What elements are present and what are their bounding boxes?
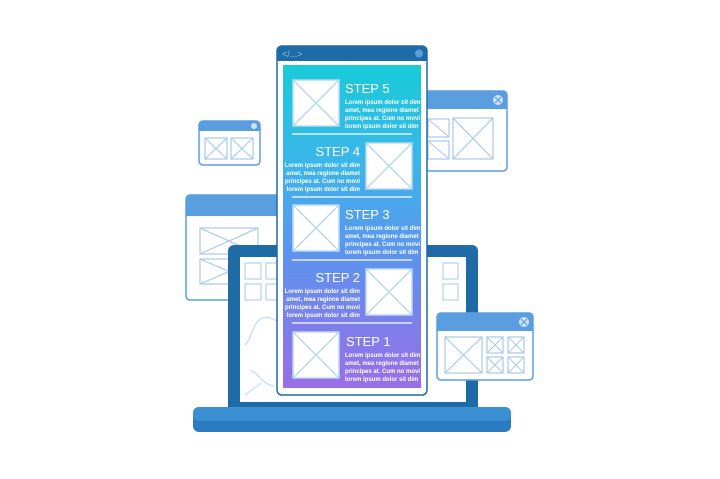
step 1: lorem ipsum dolor sit dim [345,377,418,383]
window: right bottom [437,313,533,380]
step 3: STEP 3 [345,207,390,222]
step 2: STEP 2 [315,270,360,285]
step 5: principes at. Cum no movi [345,116,420,122]
step 1: principes at. Cum no movi [345,369,420,375]
window: left small [199,121,260,165]
step 4: STEP 4 [315,144,360,159]
step 4 [285,143,412,193]
laptop [193,245,511,432]
step 4: amet, mea regione diamet [286,171,360,177]
window: right top [418,91,507,171]
phone [277,46,427,395]
step 3: Lorem ipsum dolor sit dim [345,226,420,232]
step 5: STEP 5 [345,81,390,96]
step 3: principes at. Cum no movi [345,242,420,248]
step 3 [293,205,420,256]
step 1: Lorem ipsum dolor sit dim [345,353,420,359]
laptop base [193,407,511,432]
step 1: STEP 1 [346,334,391,349]
window: left large [186,195,286,300]
step 2: amet, mea regione diamet [286,297,360,303]
step 4: Lorem ipsum dolor sit dim [285,163,360,169]
step 5 [293,80,420,130]
step 5: amet, mea regione diamet [345,108,419,114]
phone: </...> [282,49,303,59]
step 1: amet, mea regione diamet [345,361,419,367]
step 1 [293,332,420,383]
step 2 [285,269,412,319]
step 5: Lorem ipsum dolor sit dim [345,100,420,106]
step 4: principes at. Cum no movi [285,179,360,185]
step 4: lorem ipsum dolor sit dim [287,187,360,193]
step 2: Lorem ipsum dolor sit dim [285,289,360,295]
step 2: principes at. Cum no movi [285,305,360,311]
step 5: lorem ipsum dolor sit dim [345,124,418,130]
step 2: lorem ipsum dolor sit dim [287,313,360,319]
step 3: lorem ipsum dolor sit dim [345,250,418,256]
step 3: amet, mea regione diamet [345,234,419,240]
